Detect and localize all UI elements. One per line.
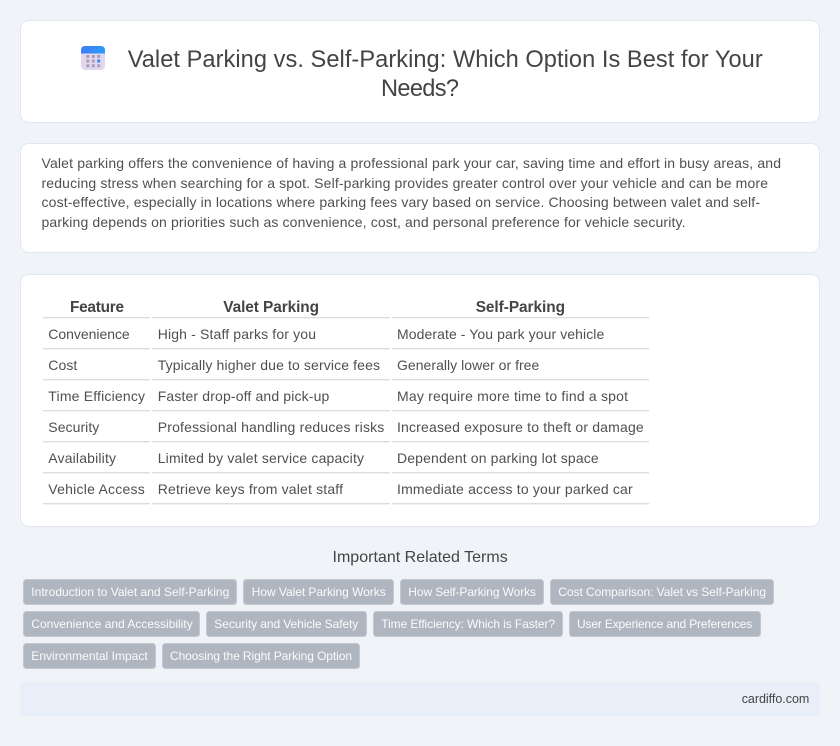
heading: related terms: Important Related Terms [332, 549, 508, 566]
related term tags [24, 580, 774, 668]
tag: how self-parking works [400, 580, 544, 604]
panel: title header [20, 20, 820, 122]
tag: choosing the right option: Choosing the Right Parking Option [170, 649, 352, 663]
text block: intro paragraph [42, 155, 781, 230]
table row: vehicle access: Immediate access to your parked car [397, 481, 633, 497]
tag: time efficiency: Time Efficiency: Which is Faster? [381, 617, 555, 631]
tag: introduction: Introduction to Valet and Self-Parking [31, 585, 229, 599]
tag: choosing the right option [162, 644, 360, 668]
table row: availability [43, 450, 649, 473]
table header row: Feature [70, 299, 124, 316]
table row: cost: Generally lower or free [397, 357, 540, 373]
table row: security: Security [48, 419, 99, 435]
tag: convenience: Convenience and Accessibility [31, 617, 193, 631]
tag: security: Security and Vehicle Safety [214, 617, 358, 631]
table row: availability: Dependent on parking lot space [397, 450, 599, 466]
tag: cost comparison: Cost Comparison: Valet vs Self-Parking [558, 585, 766, 599]
table row: cost: Typically higher due to service fees [158, 357, 380, 373]
icon: calendar [81, 46, 105, 70]
footer [20, 682, 820, 716]
table row: convenience: Moderate - You park your vehicle [397, 326, 605, 342]
tag: security [206, 612, 366, 636]
footer: cardiffo.com [742, 692, 809, 706]
tag: how valet parking works: How Valet Parking Works [252, 585, 386, 599]
table row: time efficiency: Faster drop-off and pick-up [158, 388, 330, 404]
tag: time efficiency [374, 612, 562, 636]
title: Needs? [381, 76, 459, 102]
tag: environmental impact: Environmental Impact [31, 649, 148, 663]
text block: intro paragraph: parking depends on priorities such as convenience, cost, and personal preference for vehicle security. [42, 214, 686, 230]
table header row: Valet Parking [223, 299, 319, 316]
table row: availability: Availability [48, 450, 116, 466]
tag: user experience: User Experience and Preferences [577, 617, 752, 631]
table row: security: Professional handling reduces risks [158, 419, 384, 435]
tag: how valet parking works [244, 580, 394, 604]
table row: convenience: Convenience [48, 326, 130, 342]
text block: intro paragraph: cost-effective, especially in locations where parking fees vary based on service. Choosing between valet and self- [42, 194, 760, 210]
table row: convenience [43, 326, 649, 349]
tag: introduction [24, 580, 236, 604]
text block: intro paragraph: reducing stress when searching for a spot. Self-parking provides greater control over your vehicle and can be more [42, 175, 768, 191]
tag: convenience [24, 612, 200, 636]
table row: availability: Limited by valet service capacity [158, 450, 364, 466]
tag: user experience [570, 612, 760, 636]
table row: security [43, 419, 649, 442]
tag: how self-parking works: How Self-Parking Works [408, 585, 536, 599]
table row: vehicle access: Vehicle Access [48, 481, 145, 497]
table row: security: Increased exposure to theft or damage [397, 419, 644, 435]
table row: vehicle access [43, 481, 649, 504]
text block: intro paragraph: Valet parking offers the convenience of having a professional park your car, saving time and effort in busy areas, and [42, 155, 781, 171]
table row: vehicle access: Retrieve keys from valet staff [158, 481, 343, 497]
title [128, 47, 763, 102]
tag: environmental impact [24, 644, 156, 668]
table row: convenience: High - Staff parks for you [158, 326, 316, 342]
table row: time efficiency [43, 388, 649, 411]
title: Valet Parking vs. Self-Parking: Which Option Is Best for Your [128, 47, 763, 73]
table row: time efficiency: May require more time to find a spot [397, 388, 628, 404]
panel: comparison table [20, 274, 820, 526]
panel: introduction text [20, 144, 820, 252]
table header row [43, 299, 649, 318]
table row: cost: Cost [48, 357, 77, 373]
tag: cost comparison [550, 580, 774, 604]
table row: cost [43, 357, 649, 380]
table row: time efficiency: Time Efficiency [48, 388, 145, 404]
table header row: Self-Parking [476, 299, 565, 316]
